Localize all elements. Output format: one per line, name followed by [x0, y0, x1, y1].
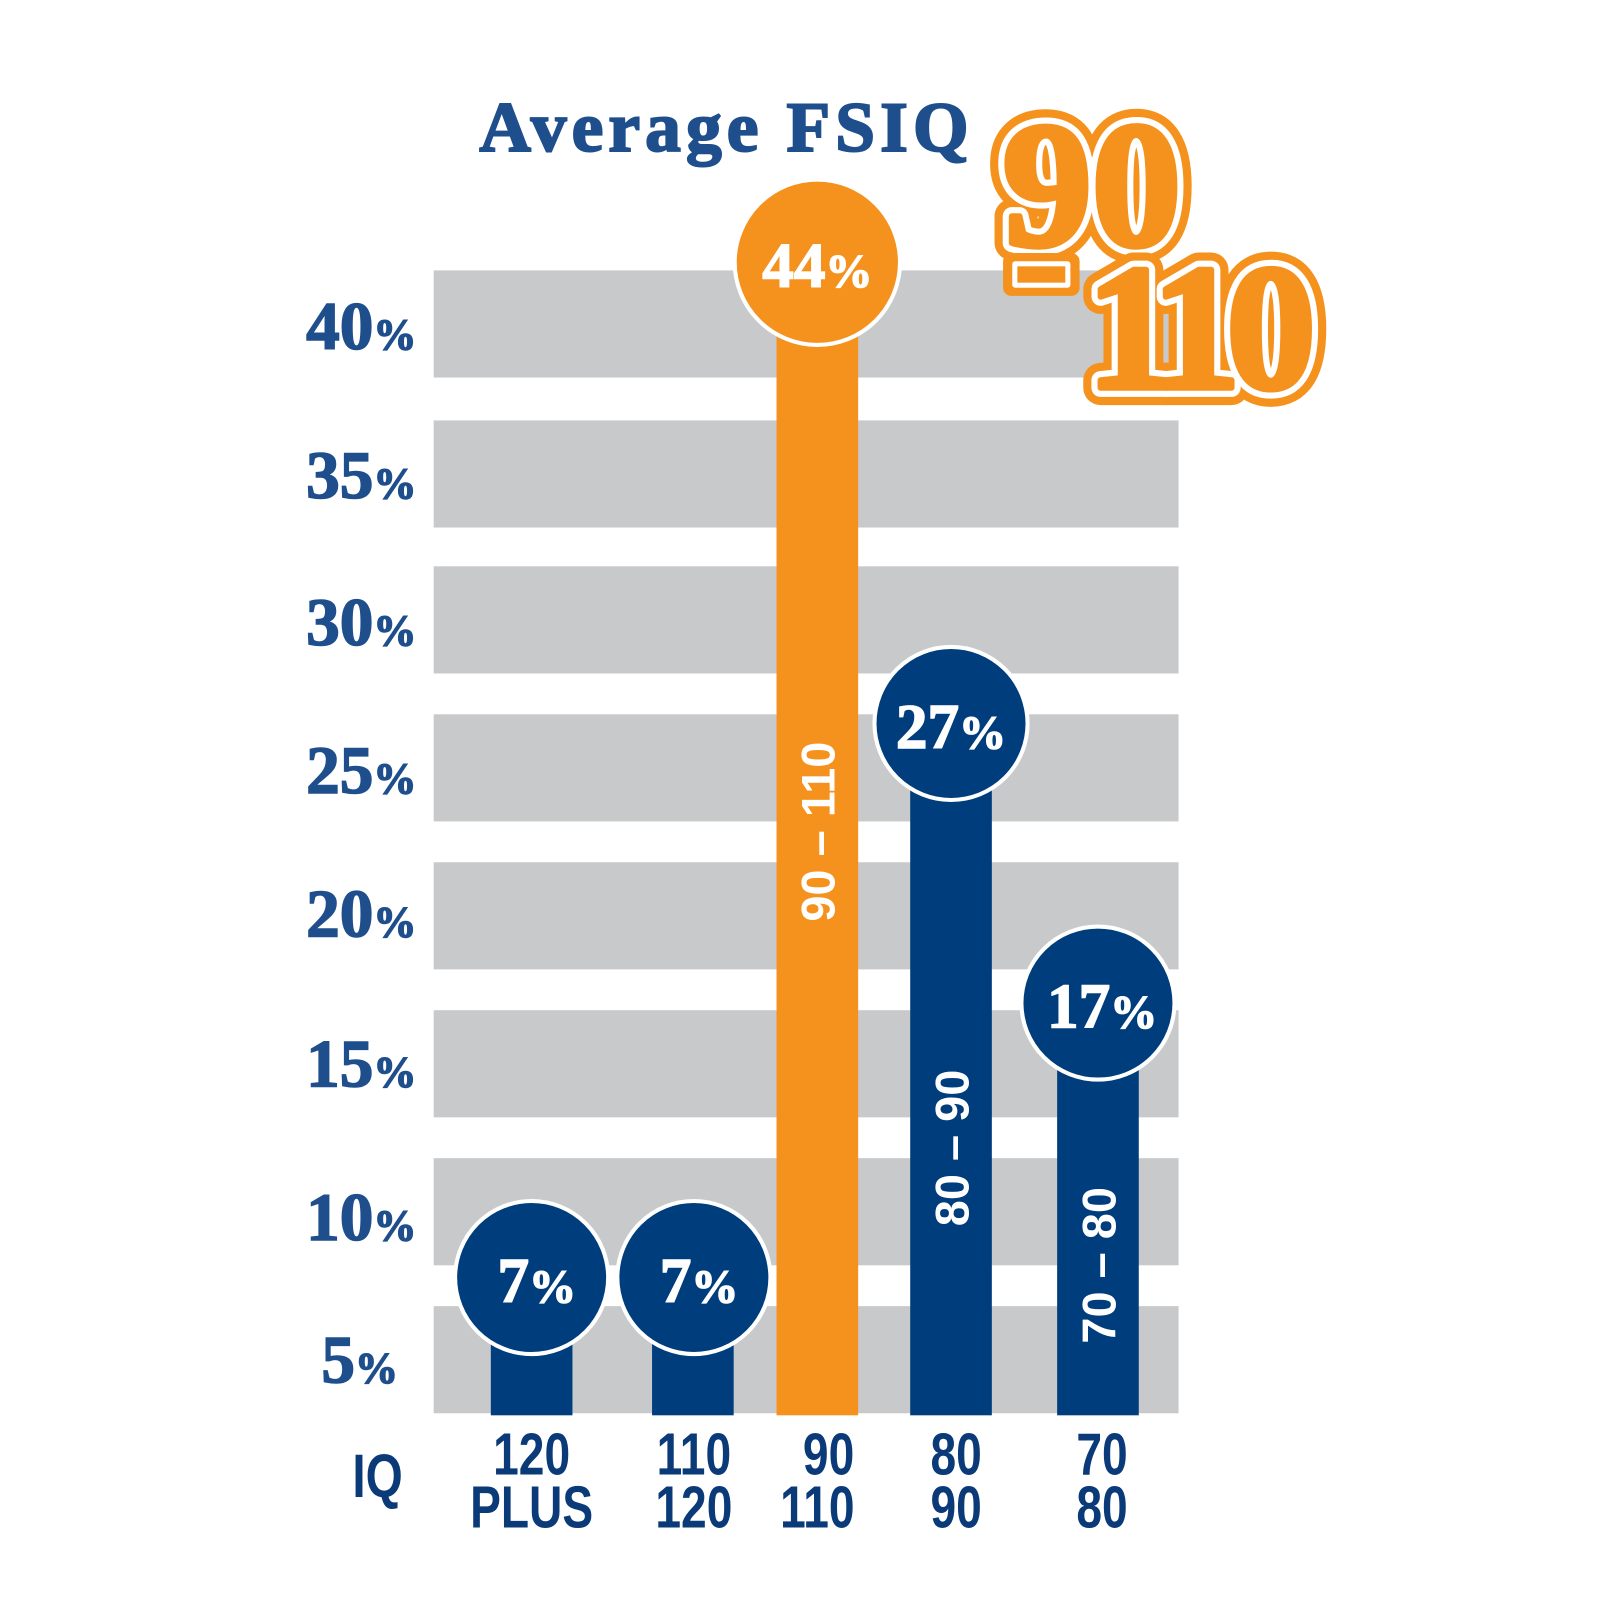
- circle: 7%: [455, 1201, 608, 1354]
- x axis labels: 120: [655, 1475, 732, 1541]
- circle: 7%: [617, 1201, 770, 1354]
- bar: 80-90: [910, 755, 992, 1415]
- bar: 90-110: [777, 306, 858, 1415]
- y axis labels: 35%: [306, 438, 416, 513]
- big 90-110 badge: 110: [1086, 229, 1309, 427]
- big 90-110 badge: 90: [1003, 86, 1181, 284]
- y axis labels: [306, 289, 416, 1398]
- circle: 27%: [874, 647, 1028, 800]
- y axis labels: 15%: [306, 1027, 416, 1102]
- bar: 110-120: [652, 1337, 734, 1415]
- y axis labels: 5%: [321, 1323, 398, 1398]
- x axis labels: 80: [1076, 1475, 1128, 1541]
- big 90-110 badge: [1003, 86, 1309, 427]
- y axis labels: 20%: [306, 877, 416, 952]
- x axis labels: 90: [930, 1475, 982, 1541]
- x axis labels: 120: [493, 1422, 570, 1488]
- y axis labels: 40%: [306, 289, 416, 364]
- x axis labels: PLUS: [470, 1475, 593, 1541]
- bar: 120 plus: [491, 1337, 572, 1415]
- x axis labels: 70: [1076, 1422, 1128, 1488]
- circle: 27%: 27%: [896, 692, 1006, 762]
- bar: 70-80: [1057, 1031, 1139, 1415]
- big 90-110 badge: 90: [1003, 86, 1181, 284]
- bar: 70-80: 70 – 80: [1073, 1187, 1125, 1344]
- x axis labels: 90: [803, 1422, 854, 1488]
- x axis labels: 110: [780, 1475, 855, 1541]
- title: Average FSIQ: [479, 88, 974, 167]
- x axis labels: 80: [930, 1422, 982, 1488]
- y axis labels: 30%: [306, 585, 416, 660]
- circle: 7%: 7%: [660, 1246, 738, 1316]
- circle: 44%: 44%: [762, 231, 872, 301]
- big 90-110 badge: 110: [1086, 229, 1309, 427]
- bar: 90-110: 90 – 110: [793, 742, 845, 922]
- x axis labels: IQ: [352, 1441, 403, 1510]
- circle: 44%: [735, 180, 900, 345]
- big 90-110 badge: 110: [1086, 229, 1309, 427]
- bar: 80-90: 80 – 90: [926, 1070, 978, 1226]
- y axis labels: 25%: [306, 733, 416, 808]
- x axis labels: 110: [657, 1422, 731, 1488]
- circle: 7%: 7%: [497, 1246, 576, 1316]
- circle: 17%: 17%: [1047, 972, 1157, 1042]
- x axis labels: [352, 1422, 1128, 1541]
- big 90-110 badge: 90: [1003, 86, 1181, 284]
- circle: 17%: [1021, 927, 1174, 1080]
- y axis labels: 10%: [306, 1180, 416, 1255]
